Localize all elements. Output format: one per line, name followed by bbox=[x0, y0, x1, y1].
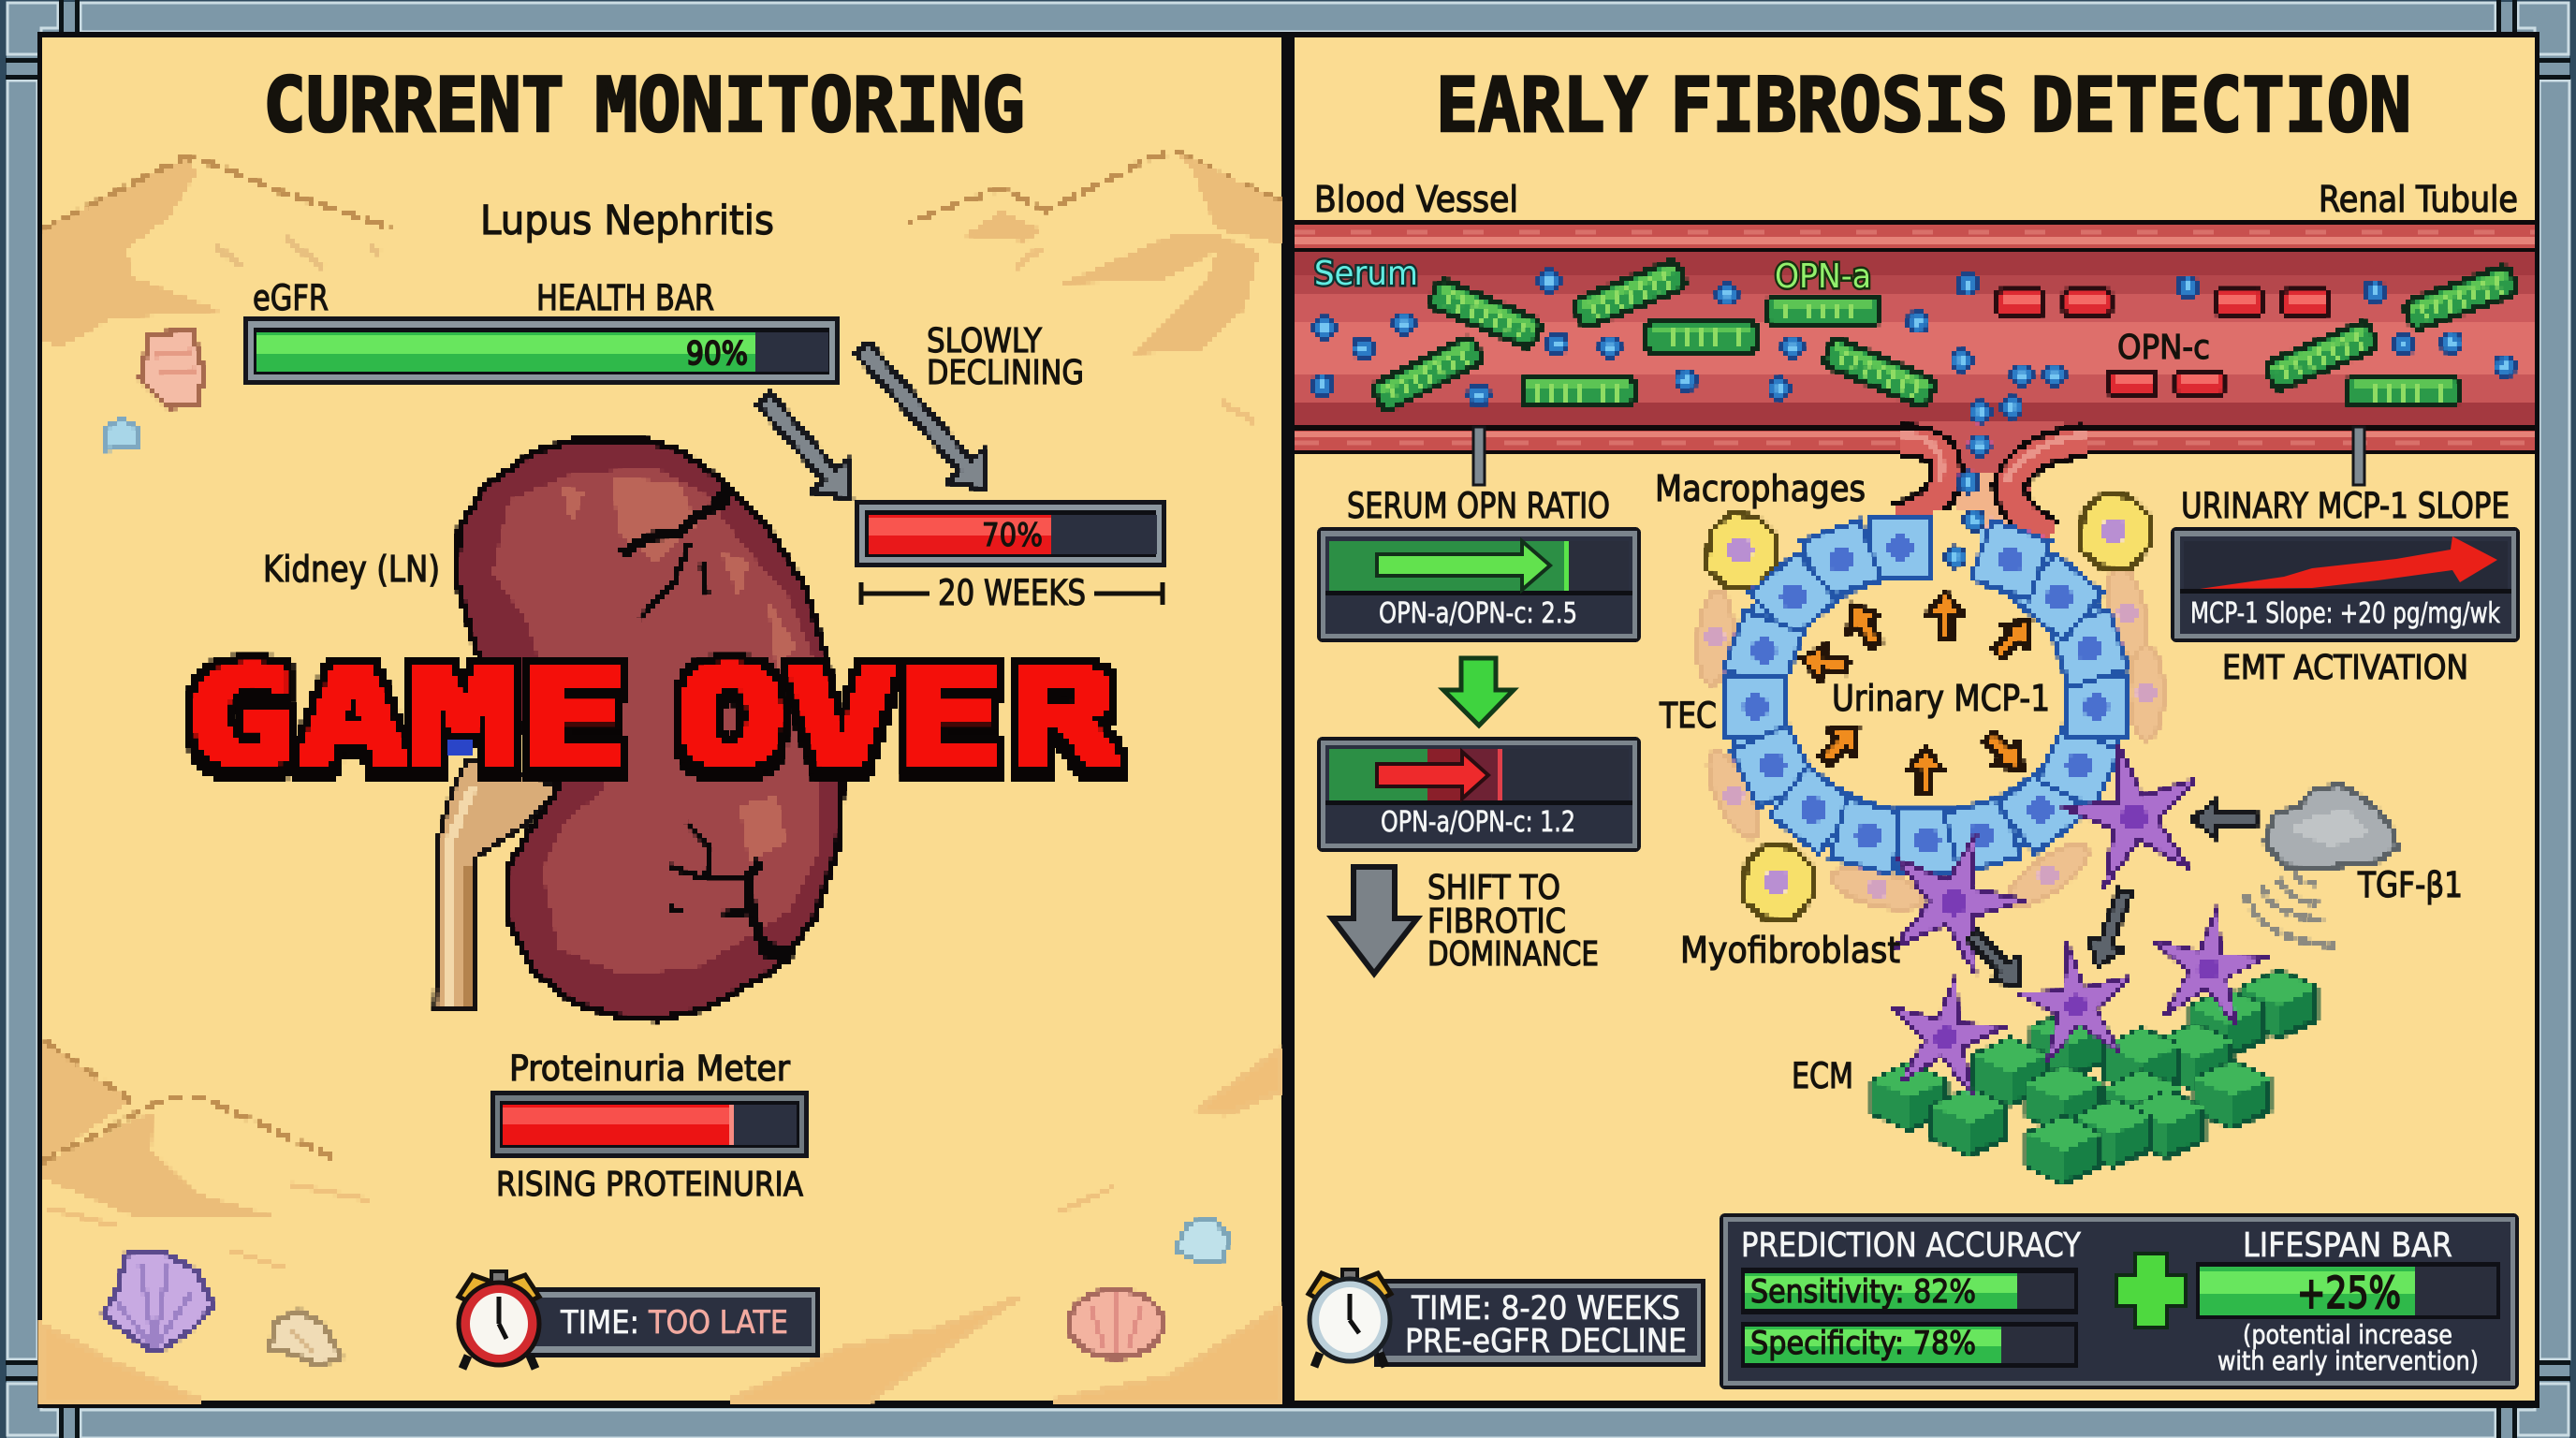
label: slowly declining: DECLINING bbox=[927, 354, 1084, 392]
eGFR bar 90% bbox=[243, 316, 840, 385]
kidney bbox=[456, 440, 842, 1020]
label: health bar: HEALTH BAR bbox=[536, 278, 714, 318]
time window plate: PRE-eGFR DECLINE bbox=[1405, 1323, 1687, 1360]
eGFR bar 70%: 70% bbox=[982, 517, 1043, 554]
specificity bar bbox=[1741, 1322, 2078, 1368]
illustrated cells layer bbox=[1312, 259, 2519, 1183]
renal tubule ring of epithelial cells bbox=[1724, 517, 2129, 873]
shell: pink right bbox=[1069, 1290, 1163, 1357]
gauge: OPN ratio 1.2 bbox=[1317, 737, 1641, 852]
label: opn-c: OPN-c bbox=[2117, 329, 2210, 367]
ureter bbox=[435, 758, 559, 1008]
capillary channel bbox=[1898, 423, 2086, 552]
heading: lifespan bar: LIFESPAN BAR bbox=[2243, 1226, 2452, 1265]
gauge: MCP-1 slope bbox=[2171, 527, 2520, 642]
lifespan bar bbox=[2196, 1262, 2500, 1319]
arrow: gray shift down bbox=[1332, 867, 1417, 974]
label: proteinuria meter: Proteinuria Meter bbox=[509, 1049, 791, 1089]
dark arrow: myofibroblast to ECM bbox=[1958, 921, 2034, 999]
label: TEC: TEC bbox=[1659, 696, 1717, 736]
label: renal tubule: Renal Tubule bbox=[2319, 179, 2518, 220]
shell: tan bbox=[270, 1311, 342, 1365]
label: ECM: ECM bbox=[1792, 1056, 1853, 1096]
heading: prediction accuracy: PREDICTION ACCURACY bbox=[1741, 1226, 2082, 1265]
label: serum: Serum bbox=[1314, 255, 1418, 293]
label: TGF-beta1: TGF-β1 bbox=[2357, 865, 2463, 905]
opn-a proteins bbox=[1370, 259, 2519, 412]
gauge: OPN ratio 1.2: OPN-a/OPN-c: 1.2 bbox=[1381, 806, 1575, 839]
eGFR bar 90%: 90% bbox=[686, 335, 748, 373]
arrow: slowly declining bbox=[843, 332, 1004, 506]
panel: early fibrosis detection bbox=[1295, 37, 2535, 1401]
arrow: health bar to decline bar bbox=[745, 383, 870, 515]
tubule ring backing bbox=[1753, 510, 2100, 840]
shell: blue top left bbox=[105, 419, 139, 449]
label: urinary mcp-1 slope: URINARY MCP-1 SLOPE bbox=[2181, 486, 2510, 526]
specificity bar: Specificity: 78% bbox=[1750, 1325, 1976, 1362]
label: emt activation: EMT ACTIVATION bbox=[2222, 649, 2468, 687]
spindle cells bbox=[1694, 563, 2163, 917]
time too late plate: TIME: bbox=[560, 1304, 639, 1342]
label: kidney: Kidney (LN) bbox=[263, 549, 440, 590]
label: blood vessel: Blood Vessel bbox=[1314, 179, 1518, 220]
title: early fibrosis detection: EARLY FIBROSIS DETECTION bbox=[1436, 62, 2411, 149]
label: eGFR: eGFR bbox=[253, 278, 329, 318]
panel: current monitoring bbox=[41, 37, 1281, 1401]
label: shift to fibrotic dominance: DOMINANCE bbox=[1427, 935, 1599, 974]
sensitivity bar bbox=[1741, 1268, 2078, 1314]
label: serum opn ratio: SERUM OPN RATIO bbox=[1347, 486, 1610, 526]
time window plate: TIME: 8-20 WEEKS bbox=[1411, 1290, 1680, 1328]
dark arrow: TGF to myofibroblast bbox=[2192, 800, 2256, 838]
label: shift to fibrotic dominance: FIBROTIC bbox=[1427, 902, 1566, 941]
sensitivity bar: Sensitivity: 82% bbox=[1750, 1273, 1976, 1311]
ECM collagen blocks bbox=[1872, 971, 2317, 1183]
timespan: 20 weeks bbox=[859, 573, 1164, 613]
label: myofibroblast: Myofibroblast bbox=[1680, 930, 1900, 971]
eGFR bar 70% bbox=[855, 500, 1166, 567]
note: potential increase bbox=[2217, 1319, 2479, 1376]
gauge: OPN ratio 2.5: OPN-a/OPN-c: 2.5 bbox=[1379, 597, 1577, 630]
shell: blue right bbox=[1176, 1219, 1228, 1262]
blue vessel fragment bbox=[447, 740, 473, 756]
blue serum molecules bbox=[1312, 271, 2515, 567]
arrow: green down bbox=[1443, 658, 1514, 726]
game over: GAME OVER bbox=[186, 641, 1119, 795]
connector: serum ratio bbox=[1473, 427, 1485, 485]
label: slowly declining: SLOWLY bbox=[927, 322, 1043, 360]
label: urinary mcp-1: Urinary MCP-1 bbox=[1832, 678, 2050, 719]
connector: urinary slope bbox=[2353, 427, 2364, 485]
shell: purple scallop bbox=[103, 1251, 213, 1350]
label: rising proteinuria: RISING PROTEINURIA bbox=[496, 1166, 803, 1204]
note: potential increase: (potential increase bbox=[2243, 1319, 2452, 1350]
timespan: 20 weeks: 20 WEEKS bbox=[938, 573, 1086, 613]
icon: green plus bbox=[2116, 1254, 2186, 1328]
desert scenery and kidney layer bbox=[41, 152, 1281, 1401]
label: opn-a: OPN-a bbox=[1775, 257, 1871, 296]
TGF-beta cloud bbox=[2265, 785, 2397, 868]
opn-c proteins bbox=[1998, 290, 2330, 395]
note: potential increase: with early intervention) bbox=[2217, 1345, 2479, 1376]
subtitle: lupus nephritis: Lupus Nephritis bbox=[480, 198, 774, 244]
time too late plate bbox=[526, 1287, 820, 1357]
TGF-beta signal waves bbox=[2245, 873, 2335, 946]
title: current monitoring: CURRENT MONITORING bbox=[263, 62, 1025, 149]
lifespan bar: +25% bbox=[2297, 1268, 2401, 1318]
shell: pink top left bbox=[140, 330, 204, 407]
macrophages bbox=[1706, 493, 2151, 919]
label: shift to fibrotic dominance: SHIFT TO bbox=[1427, 869, 1560, 907]
label: slowly declining bbox=[927, 322, 1084, 392]
blood vessel bbox=[1295, 220, 2535, 454]
icon: red alarm clock bbox=[459, 1271, 539, 1369]
time too late plate: TOO LATE bbox=[648, 1304, 788, 1342]
icon: silver alarm clock bbox=[1309, 1269, 1391, 1367]
gauge: OPN ratio 2.5 bbox=[1317, 527, 1641, 642]
myofibroblast stars bbox=[1870, 732, 2274, 1099]
dark arrow: activated cell to ECM bbox=[2080, 885, 2143, 973]
time window plate bbox=[1374, 1279, 1705, 1367]
label: shift to fibrotic dominance bbox=[1427, 869, 1599, 974]
orange MCP-1 arrows bbox=[1798, 592, 2043, 795]
label: macrophages: Macrophages bbox=[1655, 468, 1866, 509]
proteinuria bar bbox=[490, 1091, 809, 1158]
sand dunes bbox=[41, 152, 1281, 1401]
panel: prediction accuracy and lifespan bbox=[1720, 1213, 2519, 1389]
